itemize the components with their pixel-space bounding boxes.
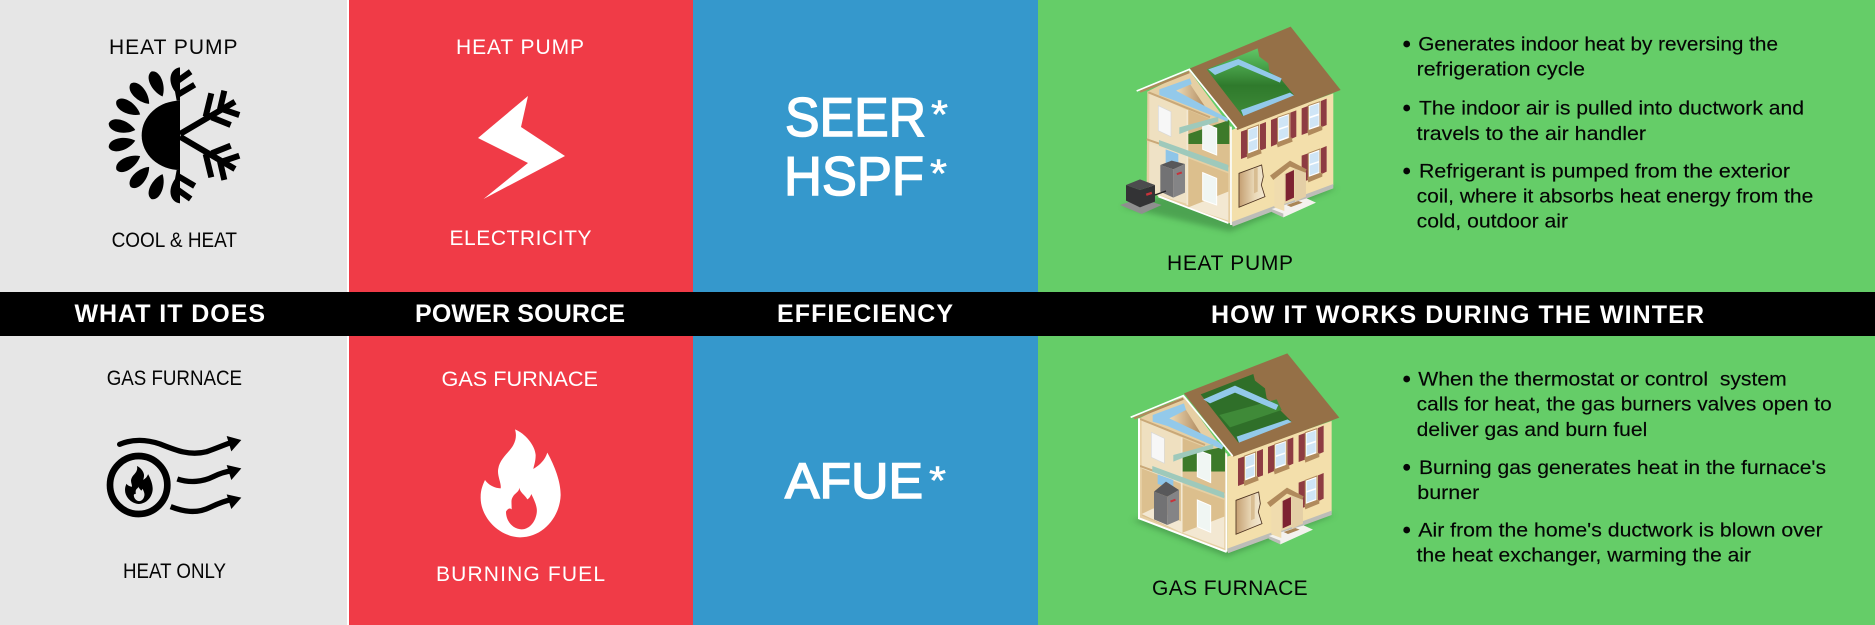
- text block: heat pump winter operation: coil, where it absorbs heat energy from the: [1417, 186, 1813, 208]
- icon: flame in circle with hot air arrows: [110, 436, 241, 514]
- bullet 2: [1403, 105, 1410, 111]
- panel: how it works, gas furnace: [1038, 336, 1875, 625]
- heading: effiecency: EFFIECIENCY: [777, 300, 953, 328]
- panel: how it works, heat pump: [1038, 0, 1875, 292]
- text block: heat pump winter operation: travels to the air handler: [1417, 123, 1647, 145]
- text block: gas furnace winter operation: calls for heat, the gas burners valves open to: [1417, 394, 1832, 416]
- text block: heat pump winter operation: cold, outdoor air: [1417, 211, 1569, 233]
- text block: gas furnace winter operation: Air from the home's ductwork is blown over: [1418, 520, 1823, 542]
- asterisk: AFUE: *: [929, 459, 946, 503]
- rating: SEER: SEER: [785, 86, 926, 148]
- panel: power source, gas furnace: [349, 336, 693, 625]
- text block: gas furnace winter operation: When the thermostat or control system: [1418, 369, 1787, 391]
- heading: what it does: WHAT IT DOES: [74, 300, 265, 328]
- label: heat pump: HEAT PUMP: [109, 36, 238, 59]
- asterisk: SEER: *: [931, 93, 948, 137]
- rating: HSPF: HSPF: [784, 145, 924, 207]
- label: burning fuel: BURNING FUEL: [436, 563, 605, 586]
- text block: heat pump winter operation: The indoor air is pulled into ductwork and: [1419, 98, 1804, 120]
- text block: gas furnace winter operation: [1403, 369, 1832, 567]
- label: electricity: ELECTRICITY: [450, 227, 592, 250]
- heading: power source: POWER SOURCE: [415, 300, 625, 328]
- text block: gas furnace winter operation: deliver gas and burn fuel: [1417, 419, 1647, 441]
- icon: half sun half snowflake: [107, 67, 239, 203]
- bullet 3: [1403, 527, 1410, 533]
- label: heat pump power source: HEAT PUMP: [456, 36, 584, 59]
- rating: AFUE: AFUE: [785, 453, 923, 509]
- heading: how it works during the winter: HOW IT WORKS DURING THE WINTER: [1211, 301, 1704, 329]
- bullet 1: [1403, 41, 1410, 47]
- illustration: heat pump house cutaway: [1120, 27, 1341, 232]
- label: gas furnace: GAS FURNACE: [107, 367, 242, 390]
- text block: heat pump winter operation: Refrigerant is pumped from the exterior: [1419, 161, 1791, 183]
- label: heat only: HEAT ONLY: [123, 560, 226, 583]
- asterisk: HSPF: *: [930, 152, 947, 196]
- label: gas furnace house: GAS FURNACE: [1152, 577, 1308, 600]
- header band: [0, 292, 1875, 336]
- text block: heat pump winter operation: refrigeration cycle: [1417, 59, 1585, 81]
- text block: gas furnace winter operation: Burning gas generates heat in the furnace's: [1419, 457, 1826, 479]
- bullet 1: [1403, 376, 1410, 382]
- panel: what it does, heat pump: [0, 0, 347, 292]
- bullet 2: [1403, 464, 1410, 471]
- icon: flame: [481, 429, 561, 537]
- text block: gas furnace winter operation: burner: [1417, 482, 1480, 504]
- label: heat pump house: HEAT PUMP: [1167, 252, 1293, 275]
- panel: what it does, gas furnace: [0, 336, 347, 625]
- panel: efficiency, heat pump: [693, 0, 1038, 292]
- panel: power source, heat pump: [349, 0, 693, 292]
- panel: efficiency, gas furnace: [693, 336, 1038, 625]
- label: cool and heat: COOL & HEAT: [112, 229, 237, 252]
- label: gas furnace power source: GAS FURNACE: [442, 368, 598, 391]
- text block: heat pump winter operation: Generates indoor heat by reversing the: [1418, 34, 1778, 56]
- illustration: gas furnace house cutaway: [1131, 353, 1339, 557]
- text block: gas furnace winter operation: the heat exchanger, warming the air: [1417, 545, 1752, 567]
- bullet 3: [1403, 168, 1410, 174]
- text block: heat pump winter operation: [1403, 34, 1813, 233]
- icon: lightning bolt: [478, 96, 565, 199]
